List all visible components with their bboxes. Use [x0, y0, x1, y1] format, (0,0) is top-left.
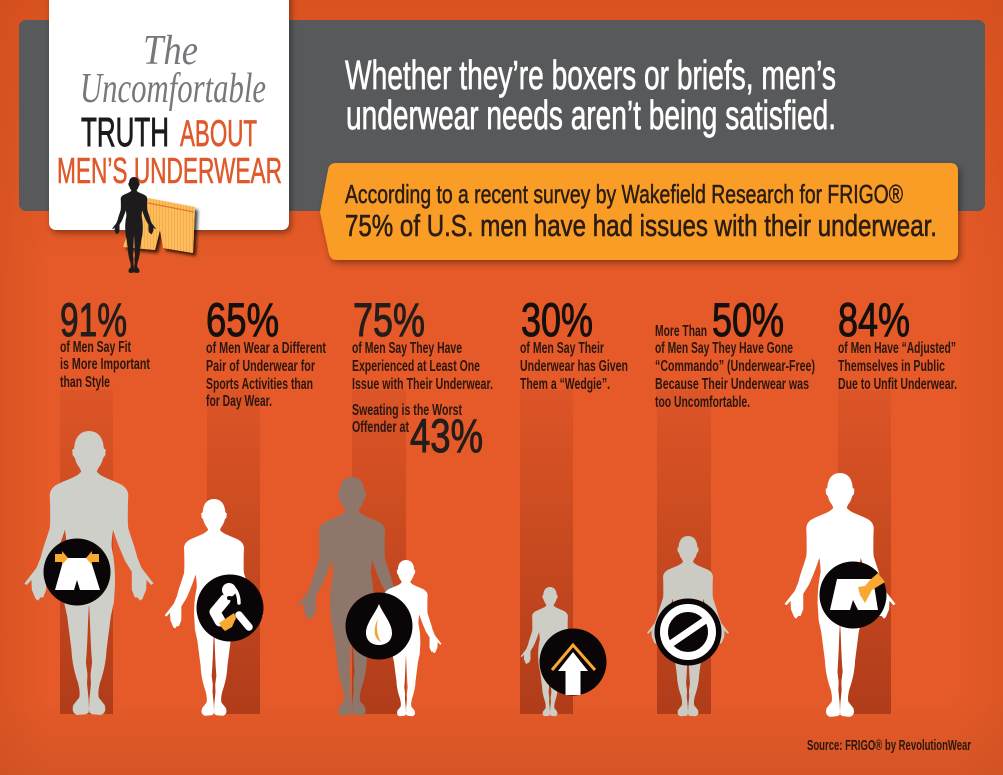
description 50%: of Men Say They Have Gone — [655, 340, 793, 357]
header grey band — [19, 20, 985, 211]
description 91%: than Style — [60, 374, 110, 391]
description 50%: Because Their Underwear was — [655, 376, 809, 393]
description 75%: Issue with Their Underwear. — [352, 376, 493, 393]
description 75% — [352, 340, 493, 393]
column 4: 30% — [520, 293, 628, 716]
description 50%: too Uncomfortable. — [655, 394, 750, 411]
icon: prohibited sign — [654, 598, 722, 666]
icon: sit-up — [196, 574, 264, 642]
title: Truth About: ABOUT — [180, 113, 257, 154]
stat 30%: 30% — [521, 293, 593, 346]
icon: man silhouette small — [112, 177, 156, 273]
sweating note: Offender at — [352, 419, 409, 436]
icon: boxer shorts — [123, 198, 195, 253]
description 84%: Themselves in Public — [838, 358, 945, 375]
description 30%: of Men Say Their — [520, 340, 604, 357]
description 65%: for Day Wear. — [206, 393, 272, 410]
icon: tight shorts — [44, 538, 110, 606]
title: The Uncomfortable: The — [143, 28, 198, 74]
sweating note: 43% — [410, 409, 483, 462]
description 30% — [520, 340, 628, 393]
column 1: 91% — [24, 293, 154, 715]
title: Truth About: TRUTH — [81, 109, 169, 155]
title: The Uncomfortable: Uncomfortable — [80, 66, 266, 112]
stat More Than 50%: More Than — [655, 323, 707, 340]
icon: wedgie arrow — [540, 628, 606, 696]
sweating note: Sweating is the Worst — [352, 402, 462, 419]
figure 3 large — [298, 477, 406, 716]
callout — [320, 163, 958, 260]
description 91% — [60, 339, 150, 391]
sweating note — [352, 402, 483, 462]
stat 65%: 65% — [206, 293, 279, 346]
stat More Than 50% — [655, 293, 784, 346]
figure 6 — [785, 473, 895, 717]
description 50%: “Commando” (Underwear-Free) — [655, 358, 815, 375]
column 5: 50% — [647, 293, 815, 716]
description 50% — [655, 340, 815, 411]
title: The Uncomfortable — [80, 28, 266, 112]
description 91%: of Men Say Fit — [60, 339, 131, 356]
column 3: 75% — [298, 293, 493, 716]
background bars — [60, 390, 891, 714]
title: Men's Underwear: MEN’S UNDERWEAR — [57, 150, 282, 191]
stat More Than 50%: 50% — [712, 293, 784, 346]
description 65%: Pair of Underwear for — [206, 358, 315, 375]
description 30%: Underwear has Given — [520, 358, 628, 375]
figure 2 — [165, 499, 263, 716]
stat 84%: 84% — [838, 293, 910, 346]
figure 3 small — [370, 560, 442, 716]
description 65% — [206, 340, 326, 410]
description 84% — [838, 340, 957, 393]
figure 1 — [24, 431, 154, 715]
description 75%: of Men Say They Have — [352, 340, 462, 357]
title card — [49, 0, 289, 273]
icon: adjusting hand — [820, 562, 886, 628]
description 30%: Them a “Wedgie”. — [520, 376, 610, 393]
icon: sweat drop — [346, 592, 412, 660]
description 65%: Sports Activities than — [206, 376, 313, 393]
figure 4 — [521, 587, 579, 716]
figure 5 — [647, 536, 729, 716]
headline — [345, 52, 836, 138]
column 2: 65% — [165, 293, 326, 716]
column 6: 84% — [785, 293, 957, 717]
stat 91%: 91% — [60, 293, 127, 346]
description 65%: of Men Wear a Different — [206, 340, 326, 357]
description 75%: Experienced at Least One — [352, 358, 480, 375]
description 91%: is More Important — [60, 356, 150, 373]
stat 75%: 75% — [353, 293, 425, 346]
